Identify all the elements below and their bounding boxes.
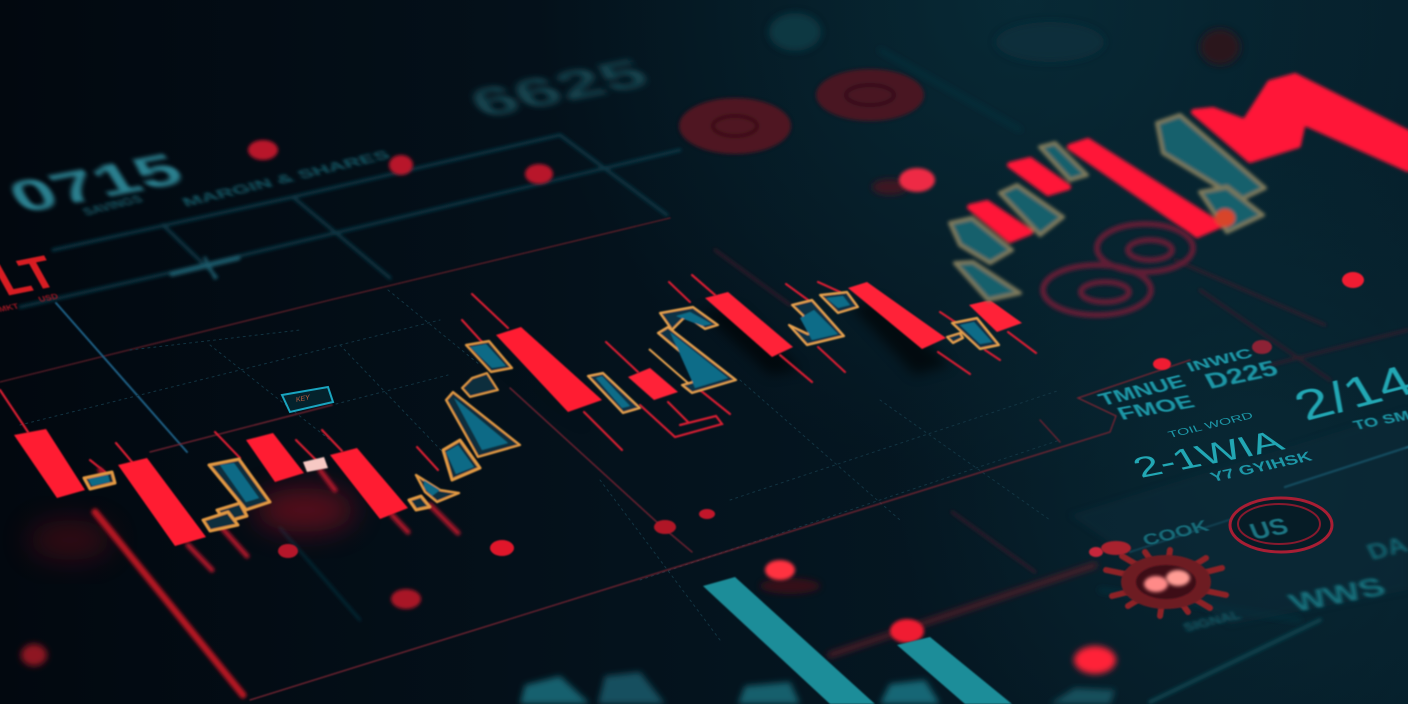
- data readouts, right side: TO SM: [1351, 409, 1408, 433]
- candlesticks: centre section: [588, 282, 1022, 413]
- candlesticks: left section: [14, 327, 602, 546]
- data readouts, right side: TMNUE: [1095, 372, 1189, 410]
- glow and shadows under candles: [28, 179, 950, 560]
- gear indicator: [1089, 541, 1226, 616]
- data readouts, right side: INWIC: [1184, 346, 1256, 375]
- ring badge: [1230, 498, 1332, 552]
- mesh panel bottom right: [1070, 410, 1408, 625]
- hollow teal candles: [84, 341, 520, 531]
- data readouts, right side: TOIL WORD: [1166, 410, 1256, 440]
- solid red candles: [14, 327, 602, 546]
- data readouts, right side: WWS: [1284, 573, 1391, 618]
- red indicator dots: [21, 140, 1364, 674]
- out of focus round badges, top: [679, 13, 1240, 154]
- candlesticks: upper right, out of focus: [950, 76, 1408, 300]
- data readouts, right side: SIGNAL: [1181, 608, 1243, 634]
- data readouts, right side: 2-1WIA: [1127, 425, 1290, 484]
- small label chip: KEY: [296, 394, 310, 404]
- teal volume bars, bottom: [520, 577, 1115, 704]
- data readouts, right side: D225: [1200, 356, 1283, 394]
- small label chip: [282, 387, 333, 412]
- data readouts, right side: [1095, 346, 1408, 634]
- data readouts, right side: FMOE: [1114, 393, 1198, 424]
- figures, out of focus top: [0, 51, 657, 222]
- wicks: [0, 275, 1036, 695]
- pale doji candle: [303, 457, 328, 472]
- figures, out of focus top: SAVINGS: [80, 192, 145, 218]
- red label at left edge: USD: [37, 292, 60, 304]
- figures, out of focus top: MARGIN & SHARES: [180, 148, 393, 210]
- data readouts, right side: COOK: [1139, 516, 1213, 549]
- coin symbols behind candles: [1043, 224, 1193, 315]
- figures, out of focus top: 0715: [0, 144, 193, 222]
- data readouts, right side: Y7 GYIHSK: [1208, 450, 1315, 485]
- ring badge: US: [1246, 514, 1292, 545]
- figures, out of focus top: 6625: [461, 51, 657, 126]
